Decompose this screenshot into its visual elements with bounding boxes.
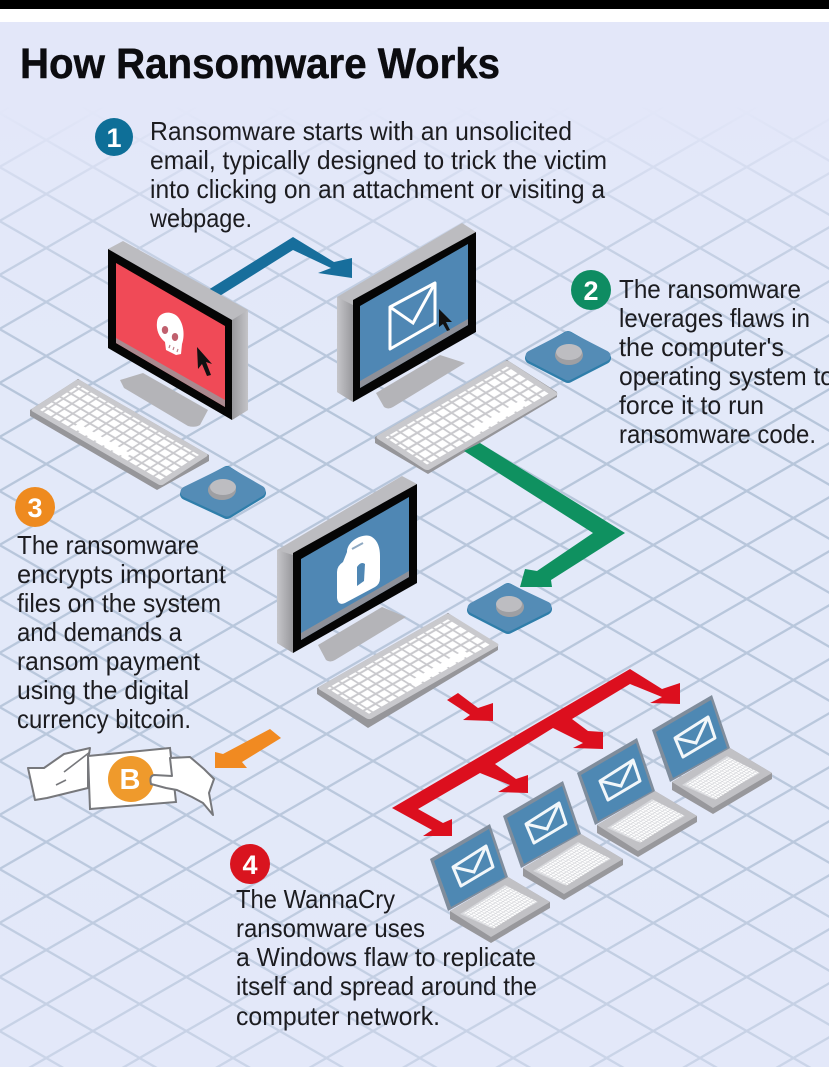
icon: skull [157,313,184,355]
monitor 2 [337,223,476,402]
right hand [150,757,214,815]
step 1 text [149,116,607,233]
step 2 text: leverages flaws in [619,303,810,333]
step 4 text: itself and spread around the [236,971,537,1001]
monitor stand [120,373,208,427]
step 2 text: the computer's [619,332,784,362]
banknote [88,748,176,809]
step 3 badge [15,487,55,527]
mouse pad 1 [186,472,260,513]
step 2 text [619,274,829,449]
step 2 text: The ransomware [619,274,801,304]
monitor 1 [108,241,248,420]
arrow: green from computer 2 to computer 3 [464,443,625,587]
step 4 text: a Windows flaw to replicate [236,942,536,972]
step 3 text: The ransomware [17,530,199,560]
monitor stand [376,355,465,408]
title: How Ransomware Works [20,40,500,88]
bitcoin coin: B [120,764,140,796]
laptop 2 [503,781,623,900]
icon: cursor [197,347,212,376]
step 3 text [17,530,227,734]
icon: envelope [390,283,435,349]
arrow: red branching to laptops [392,669,680,836]
step 2 text: ransomware code. [619,419,816,449]
step 1 text: email, typically designed to trick the victim [150,145,607,175]
arrow: blue from infected to target computer [208,237,352,297]
step 4 badge [230,844,270,884]
laptop 3 [577,738,697,857]
step 2 text: force it to run [619,390,764,420]
step 4 text: The WannaCry [236,884,395,914]
computer 2: receives email [337,223,605,474]
laptop 4 [652,695,772,814]
mouse pad 3 [473,589,546,628]
step 3 text: currency bitcoin. [17,704,191,734]
arrow: small red [447,693,493,721]
step 3 text: encrypts important [17,559,227,589]
left hand [28,748,90,800]
step 1 text: into clicking on an attachment or visiting a [150,174,605,204]
icon: padlock [337,535,380,604]
keyboard 3 [317,613,500,728]
payment illustration: hands and bitcoin [28,748,214,815]
step 3 text: using the digital [17,675,189,705]
step 1 badge [95,118,133,156]
step 4 text [236,884,537,1031]
icon: cursor [439,309,452,331]
step 3 text: ransom payment [17,646,201,676]
computer 3: encrypted [277,476,546,728]
keyboard 2 [375,360,559,474]
laptop 1 [430,824,550,943]
mouse pad 2 [531,337,605,377]
step 4 badge: 4 [242,850,258,880]
computer 1: infected [30,241,260,513]
step 2 badge: 2 [583,276,599,306]
step 3 text: files on the system [17,588,221,618]
step 4 text: ransomware uses [236,913,425,943]
keyboard 1 [30,379,209,490]
step 3 text: and demands a [17,617,182,647]
arrow: orange toward payment [215,729,281,768]
step 1 text: Ransomware starts with an unsolicited [150,116,572,146]
step 2 badge [571,270,611,310]
step 1 text: webpage. [149,203,252,233]
step 4 text: computer network. [236,1001,440,1031]
bitcoin coin [108,756,154,802]
monitor 3 [277,476,417,653]
step 1 badge: 1 [106,123,122,153]
monitor stand [318,607,406,662]
step 3 badge: 3 [27,493,43,523]
